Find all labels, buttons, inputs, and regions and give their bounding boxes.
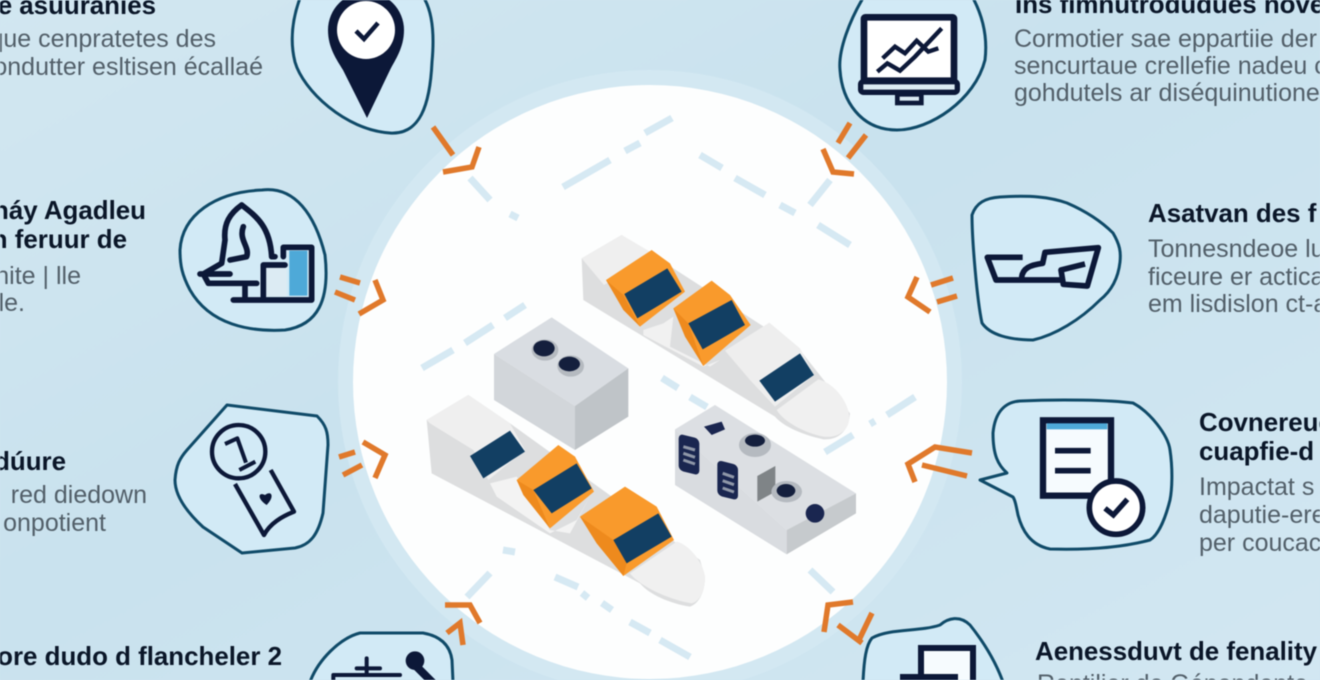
text block: sencurtaue crellefie nadeu c	[1014, 52, 1320, 80]
text block	[0, 25, 263, 81]
heading	[0, 197, 146, 254]
panel: top right	[823, 0, 1320, 174]
blob	[863, 619, 1003, 680]
machine: top row	[582, 235, 850, 439]
text block: gohdutels ar diséquinutione	[1014, 79, 1320, 107]
text block: Impactat s	[1199, 473, 1314, 501]
blob: speech bubble	[980, 400, 1172, 549]
text block: red diedown	[11, 481, 147, 509]
central machines illustration	[427, 235, 856, 607]
heading: Aenessduvt de fenality	[1035, 638, 1318, 666]
heading: Asatvan des f	[1148, 200, 1317, 228]
panel: middle left upper	[0, 190, 383, 330]
machine: control slab with icons	[675, 405, 856, 554]
panel: middle left lower	[0, 405, 385, 553]
icon: location pin with check	[328, 0, 404, 118]
arrow	[339, 442, 385, 478]
text block: ficeure er actica	[1148, 263, 1320, 291]
icon: machinery	[200, 205, 312, 300]
text block	[1199, 473, 1320, 557]
arrow	[823, 123, 866, 174]
heading: cuapfie-d	[1199, 438, 1314, 466]
arrow	[335, 277, 383, 314]
text block: onpotient	[3, 509, 106, 537]
heading: ore dudo d flancheler 2	[0, 643, 282, 671]
dashed connection lines	[422, 118, 915, 657]
panel: middle right upper	[908, 196, 1320, 340]
arrow	[445, 605, 480, 645]
panel: middle right lower	[908, 400, 1320, 557]
text block	[3, 481, 147, 537]
machine: bottom row	[427, 395, 705, 607]
text block: Tonnesndeoe lu	[1148, 235, 1320, 263]
panel: bottom left	[0, 605, 480, 680]
blob	[175, 405, 328, 553]
blob	[180, 190, 326, 330]
icon: laptop chart	[861, 17, 957, 103]
text block	[1148, 235, 1320, 318]
icon: printer document	[900, 648, 973, 680]
central white circle with halo	[338, 70, 962, 680]
panel: bottom right	[824, 602, 1318, 680]
arrow	[908, 447, 972, 482]
icon: tool	[333, 651, 433, 680]
text block: ondutter esltisen écallaé	[0, 53, 263, 81]
icon: document with check	[1043, 420, 1143, 534]
arrow	[433, 127, 479, 172]
text block	[0, 262, 81, 317]
panel: top left	[0, 0, 479, 172]
icon: goggles	[987, 248, 1098, 286]
arrow	[908, 277, 957, 312]
text block	[1014, 25, 1320, 107]
heading	[1199, 409, 1320, 466]
text block: Cormotier sae eppartiie der	[1014, 25, 1317, 53]
blob	[840, 0, 986, 130]
blob	[972, 196, 1120, 340]
machine: gray box with knobs	[494, 317, 628, 450]
blob: pin	[292, 0, 433, 133]
arrow	[824, 602, 872, 643]
icon: medal tag	[212, 425, 294, 535]
blob	[310, 633, 453, 680]
